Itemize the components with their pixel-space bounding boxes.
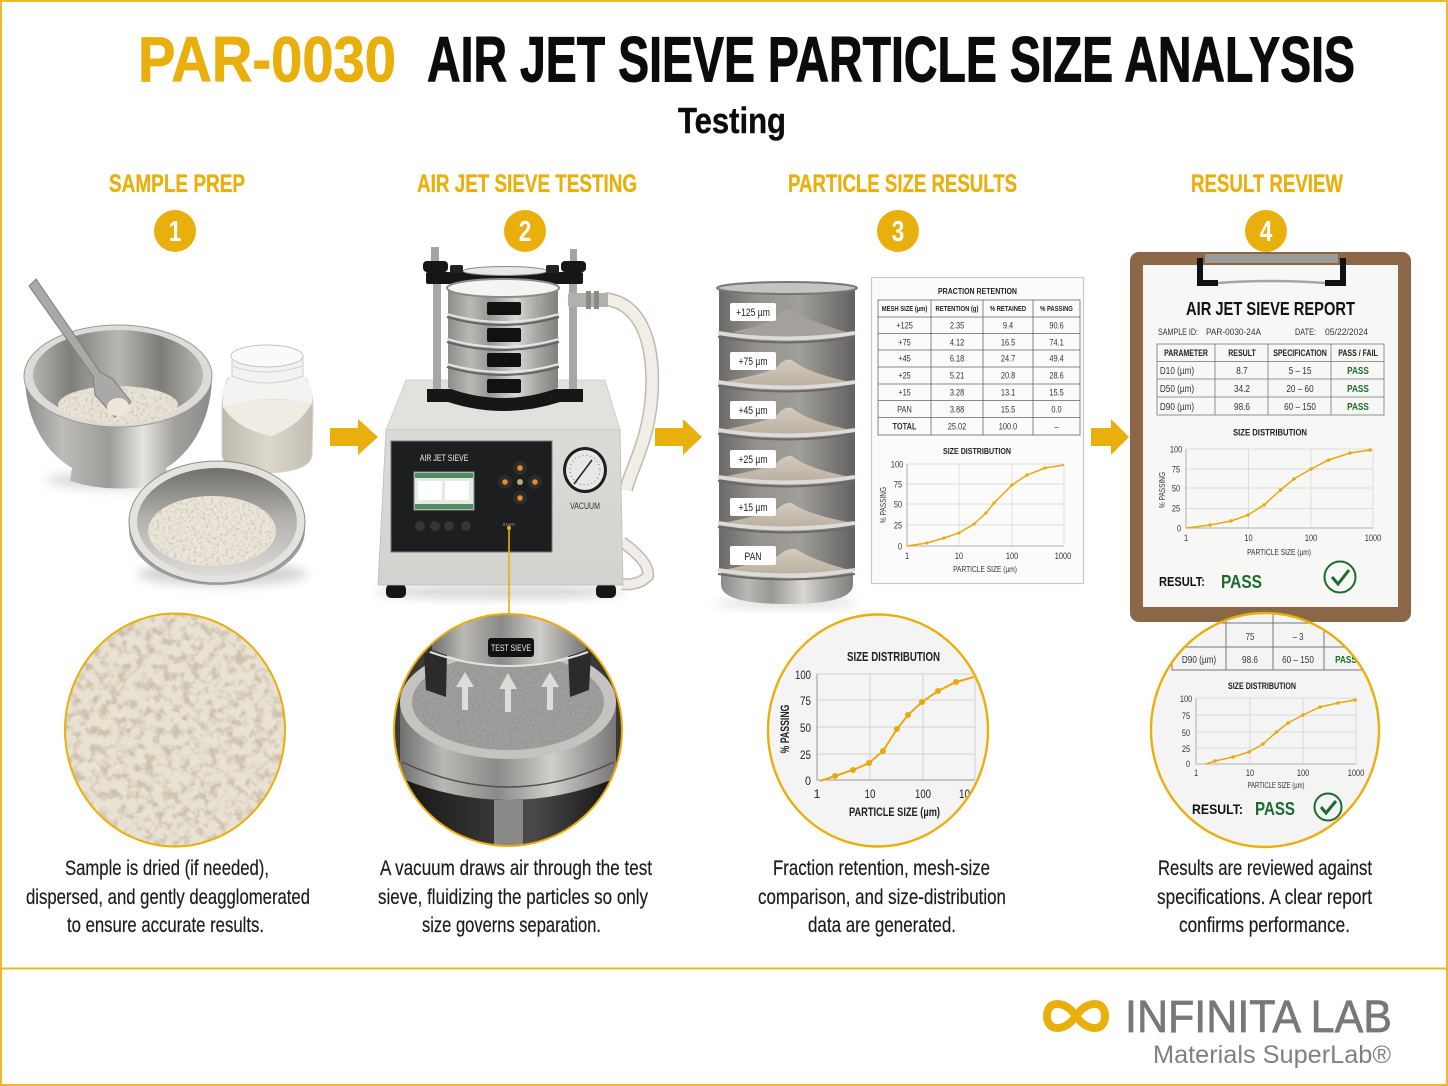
detail circle: report result: PASS — [1335, 653, 1357, 665]
mesh labels: +45 µm — [738, 405, 768, 417]
detail circle: sieve air flow: TEST SIEVE — [491, 643, 531, 653]
badge 3: 3 — [892, 214, 904, 248]
spec table: 8.7 — [1236, 364, 1248, 376]
detail circle: report result: 25 — [1182, 743, 1190, 754]
control panel — [391, 441, 552, 552]
subtitle: Testing — [678, 100, 786, 141]
spec table: SPECIFICATION — [1273, 348, 1327, 358]
text block: step 3 description: Fraction retention, mesh-size — [773, 857, 990, 880]
step heading: result review: RESULT REVIEW — [1191, 170, 1343, 198]
badge 2 — [504, 210, 546, 252]
retention table: 15.5 — [1001, 404, 1015, 415]
detail circle: report result: RESULT: — [1192, 801, 1243, 817]
size distribution chart: 100 — [1006, 550, 1018, 561]
retention table: 9.4 — [1003, 320, 1013, 331]
retention table: 100.0 — [999, 421, 1018, 432]
table title: PRACTION RETENTION — [938, 287, 1017, 296]
size distribution chart: SIZE DISTRIBUTION — [943, 447, 1011, 456]
size distribution chart: 50 — [1172, 483, 1180, 494]
base ring — [427, 389, 583, 411]
detail circle: sieve air flow — [390, 610, 626, 850]
size distribution chart: 1000 — [1055, 550, 1071, 561]
sieve ring — [400, 700, 616, 800]
arrow 2 — [655, 419, 702, 455]
size distribution chart: SIZE DISTRIBUTION — [1233, 428, 1307, 438]
connector line — [507, 526, 511, 617]
retention table: +75 — [898, 337, 911, 348]
retention table: +45 — [898, 353, 911, 364]
sample meta: 05/22/2024 — [1325, 327, 1368, 337]
logo: Infinita Lab: Materials SuperLab® — [1153, 1041, 1392, 1069]
detail circle: powder close-up — [60, 608, 290, 852]
mesh labels: +75 µm — [738, 356, 768, 368]
retention table: 74.1 — [1049, 337, 1064, 348]
retention table — [878, 300, 1080, 435]
retention table: 15.5 — [1049, 387, 1064, 398]
mesh labels: +25 µm — [738, 454, 768, 466]
arrow 3 — [1091, 419, 1129, 455]
retention table: RETENTION (g) — [936, 305, 978, 313]
spec table: 5 – 15 — [1289, 364, 1311, 376]
size distribution chart: 75 — [894, 479, 902, 490]
spec table: PASS — [1347, 364, 1369, 376]
detail circle: report result: 98.6 — [1242, 653, 1258, 665]
detail circle: report result: 100 — [1180, 693, 1192, 704]
detail circle: size distribution chart: 1000 — [959, 787, 981, 801]
retention table: 25.02 — [948, 421, 967, 432]
spec table: PASS / FAIL — [1338, 348, 1378, 358]
text block: step 2 description: A vacuum draws air through the test — [380, 857, 652, 880]
bowl body — [25, 378, 212, 488]
retention table: 2.35 — [950, 320, 964, 331]
badge 2: 2 — [519, 214, 531, 248]
spec table: PASS — [1347, 400, 1369, 412]
supports — [424, 653, 447, 697]
detail circle: size distribution chart: 0 — [805, 774, 811, 788]
clip — [1200, 254, 1343, 283]
text block: step 1 description: dispersed, and gently deagglomerated — [26, 886, 310, 909]
machine body — [375, 585, 625, 599]
retention table: 90.6 — [1049, 320, 1064, 331]
spec table: D50 (µm) — [1160, 382, 1194, 394]
retention table: 0.0 — [1051, 404, 1062, 415]
retention table: MESH SIZE (µm) — [882, 305, 927, 313]
panel: clipboard report — [1130, 252, 1411, 622]
spec table: 20 – 60 — [1286, 382, 1314, 394]
bottom cup — [721, 570, 853, 604]
size distribution chart: % PASSING — [1157, 472, 1167, 508]
size distribution chart: 25 — [1172, 503, 1180, 514]
sample meta — [1158, 327, 1368, 337]
detail circle: report result: PARTICLE SIZE (µm) — [1248, 781, 1305, 790]
size distribution chart: PARTICLE SIZE (µm) — [953, 564, 1017, 574]
text block: step 1 description: Sample is dried (if needed), — [65, 857, 269, 880]
icon: air jet sieve machine — [375, 247, 652, 599]
result line: PASS — [1221, 572, 1262, 592]
spec table: PASS — [1347, 382, 1369, 394]
detail circle: report result: 60 – 150 — [1282, 653, 1314, 665]
size distribution chart — [878, 447, 1071, 574]
sieve stack — [448, 289, 558, 398]
lower chamber — [406, 780, 610, 844]
size distribution chart: 75 — [1172, 464, 1180, 475]
text block: step 4 description: specifications. A clear report — [1157, 886, 1372, 909]
logo: Infinita Lab: INFINITA LAB — [1125, 991, 1392, 1042]
size distribution chart: 25 — [894, 520, 902, 531]
size distribution chart: 10 — [955, 550, 963, 561]
spec table: 34.2 — [1234, 382, 1250, 394]
badge 1 — [154, 210, 196, 252]
retention table: 16.5 — [1001, 337, 1015, 348]
retention table: 13.1 — [1001, 387, 1015, 398]
spec table: 60 – 150 — [1284, 400, 1316, 412]
text block: step 3 description: comparison, and size-distribution — [758, 886, 1006, 909]
title: PAR-0030 — [138, 24, 396, 96]
retention table: 24.7 — [1001, 353, 1015, 364]
mesh labels: +15 µm — [738, 502, 768, 514]
retention table: TOTAL — [893, 421, 916, 432]
size distribution chart: 0 — [898, 541, 902, 552]
text block: step 2 description: sieve, fluidizing the particles so only — [378, 886, 648, 909]
badge 1: 1 — [169, 214, 181, 248]
spec table: D10 (µm) — [1160, 364, 1194, 376]
badge 3 — [877, 210, 919, 252]
retention table: 28.6 — [1049, 370, 1064, 381]
text block: step 4 description: confirms performance. — [1179, 914, 1350, 937]
retention table: +15 — [898, 387, 911, 398]
detail circle: report result: D90 (µm) — [1182, 653, 1216, 665]
detail circle: report result: 0 — [1186, 758, 1190, 769]
size distribution chart: 10 — [1244, 532, 1253, 543]
sample meta: PAR-0030-24A — [1206, 327, 1261, 337]
powder heaps — [733, 309, 846, 337]
icon: air jet sieve machine: START — [503, 522, 516, 527]
size distribution chart: 100 — [891, 459, 903, 470]
result line: RESULT: — [1159, 574, 1205, 589]
retention table: 5.21 — [950, 370, 964, 381]
detail circle: report result: SIZE DISTRIBUTION — [1228, 681, 1296, 692]
text block: step 2 description: size governs separation. — [422, 914, 601, 937]
text block: step 4 description: Results are reviewed against — [1158, 857, 1372, 880]
detail circle: size distribution chart — [768, 614, 988, 846]
detail circle: report result: 75 — [1182, 710, 1190, 721]
logo: Infinita Lab — [1047, 991, 1392, 1069]
text block: step 4 description — [1157, 857, 1372, 937]
retention table: +125 — [896, 320, 913, 331]
detail circle: size distribution chart: 10 — [864, 787, 876, 801]
detail circle: report result: 10 — [1246, 767, 1254, 778]
step heading: air jet sieve testing: AIR JET SIEVE TESTING — [417, 170, 637, 198]
spec table: RESULT — [1228, 348, 1256, 358]
sample meta: DATE: — [1295, 327, 1316, 337]
detail circle: size distribution chart: % PASSING — [780, 704, 792, 754]
glass sections — [719, 288, 855, 572]
size distribution chart: 100 — [1305, 532, 1317, 543]
retention table: 20.8 — [1001, 370, 1015, 381]
detail circle: size distribution chart: PARTICLE SIZE (µm) — [849, 805, 940, 819]
spec table: 98.6 — [1234, 400, 1250, 412]
size distribution chart — [1157, 428, 1381, 557]
scoop — [29, 279, 131, 417]
frame posts — [433, 282, 441, 394]
spec table: PARAMETER — [1164, 348, 1208, 358]
icon: air jet sieve machine: VACUUM — [570, 501, 600, 511]
detail circle: size distribution chart: 100 — [795, 668, 811, 682]
mesh labels — [730, 303, 776, 565]
size distribution chart: % PASSING — [878, 487, 888, 523]
sample meta: SAMPLE ID: — [1158, 327, 1198, 337]
size distribution chart: 1 — [1184, 532, 1188, 543]
report title: AIR JET SIEVE REPORT — [1186, 299, 1355, 319]
detail circle: report result: 75 — [1246, 631, 1254, 642]
panel: results sheet — [872, 278, 1084, 584]
retention table: 3.28 — [950, 387, 964, 398]
stem — [494, 800, 523, 850]
detail circle: report result: 50 — [1182, 727, 1190, 738]
size distribution chart: 1 — [905, 550, 909, 561]
detail circle: size distribution chart: 50 — [800, 721, 811, 735]
pan — [129, 475, 305, 585]
text block: step 3 description: data are generated. — [808, 914, 956, 937]
icon: infinity — [1047, 1004, 1105, 1028]
text block: step 2 description — [378, 857, 652, 937]
size distribution chart: 1000 — [1365, 532, 1381, 543]
text block: step 1 description — [26, 857, 310, 937]
badge 4 — [1245, 210, 1287, 252]
spec table — [1157, 344, 1384, 415]
step heading: particle size results: PARTICLE SIZE RESULTS — [788, 170, 1017, 198]
upper sieve — [432, 610, 586, 665]
detail circle: size distribution chart: 1 — [814, 787, 821, 801]
text block: step 1 description: to ensure accurate results. — [67, 914, 264, 937]
detail circle: report result: – 3 — [1293, 631, 1303, 642]
hoses — [605, 299, 652, 490]
result line — [1159, 562, 1356, 592]
icon: sieve stack with powder fractions — [715, 282, 859, 608]
retention table: 6.18 — [950, 353, 964, 364]
detail circle: size distribution chart: 25 — [800, 748, 811, 762]
retention table: 4.12 — [950, 337, 964, 348]
detail circle: size distribution chart: SIZE DISTRIBUTION — [847, 650, 940, 664]
mesh labels: +125 µm — [736, 307, 770, 319]
detail circle: report result — [1151, 610, 1380, 847]
badge 4: 4 — [1260, 214, 1273, 248]
detail circle: report result: 1 — [1194, 767, 1198, 778]
mesh labels: PAN — [744, 551, 762, 563]
text block: step 3 description — [758, 857, 1006, 937]
detail circle: report result: 1000 — [1348, 767, 1364, 778]
vacuum gauge — [563, 447, 607, 493]
retention table: % RETAINED — [990, 305, 1026, 313]
arrow 1 — [330, 419, 378, 455]
size distribution chart: 50 — [894, 499, 902, 510]
retention table: 3.88 — [950, 404, 964, 415]
size distribution chart: PARTICLE SIZE (µm) — [1247, 547, 1311, 557]
size distribution chart: 0 — [1177, 523, 1181, 534]
retention table: +25 — [898, 370, 911, 381]
spec table: D90 (µm) — [1160, 400, 1194, 412]
hose fitting — [568, 293, 608, 307]
detail circle: report result: PASS — [1255, 799, 1295, 819]
retention table: % PASSING — [1040, 305, 1073, 313]
step heading: sample prep: SAMPLE PREP — [109, 170, 245, 198]
size distribution chart: 100 — [1170, 444, 1182, 455]
air arrows — [456, 672, 559, 712]
detail circle: size distribution chart: 100 — [915, 787, 931, 801]
retention table: PAN — [897, 404, 912, 415]
retention table: – — [1054, 421, 1059, 432]
icon: bowl with scoop, jar and pan of powder — [24, 279, 313, 586]
retention table: 49.4 — [1049, 353, 1064, 364]
detail circle: size distribution chart: 75 — [800, 694, 811, 708]
detail circle: report result: 100 — [1297, 767, 1309, 778]
icon: air jet sieve machine: AIR JET SIEVE — [420, 453, 469, 463]
jar — [222, 378, 313, 473]
rings — [718, 333, 855, 576]
